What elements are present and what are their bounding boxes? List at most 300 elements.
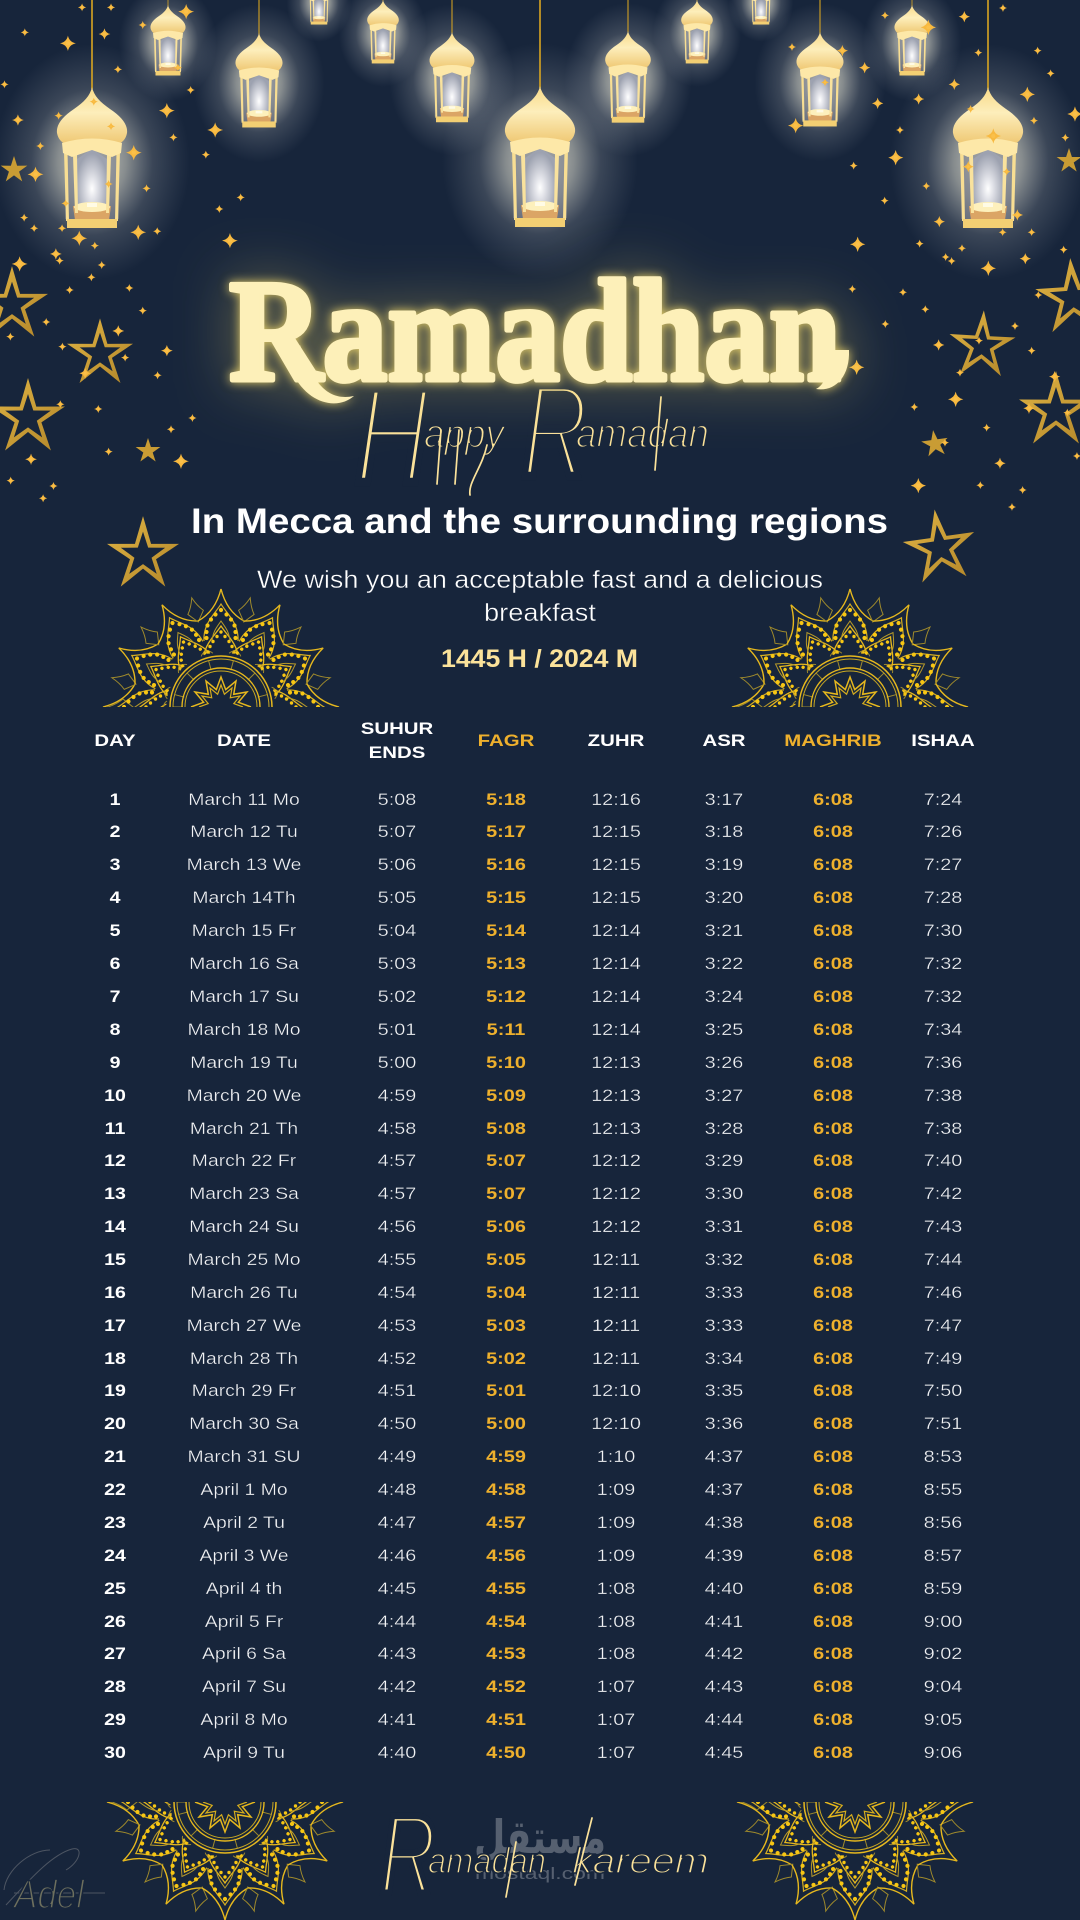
signature: Adel	[4, 1849, 105, 1917]
column: maghrib: 6:08	[813, 1150, 853, 1170]
column: ishaa: 7:38	[924, 1085, 962, 1105]
mandala: bottom right	[731, 1749, 976, 1920]
column: fagr: 5:07	[486, 1183, 526, 1203]
column: suhur ends	[378, 789, 416, 1762]
table header: DAY	[94, 731, 136, 750]
column: fagr	[486, 789, 527, 1762]
column: day: 24	[104, 1545, 127, 1565]
table header: ASR	[702, 731, 746, 750]
column: day: 3	[110, 854, 120, 874]
column: date: April 5 Fr	[205, 1612, 283, 1631]
column: suhur ends: 4:45	[378, 1578, 416, 1598]
column: zuhr: 12:10	[591, 1413, 641, 1433]
column: asr: 4:45	[705, 1742, 743, 1762]
column: suhur ends: 4:49	[378, 1446, 416, 1466]
column: zuhr: 12:14	[591, 953, 641, 973]
column: fagr: 5:01	[486, 1380, 526, 1400]
lantern: small left	[150, 0, 186, 76]
year line: 1445 H / 2024 M	[441, 645, 638, 673]
column: fagr: 5:11	[487, 1019, 525, 1039]
column: date: March 30 Sa	[189, 1414, 300, 1433]
column: day: 14	[104, 1216, 127, 1236]
column: fagr: 5:15	[486, 887, 526, 907]
column: zuhr: 1:07	[597, 1676, 635, 1696]
column: zuhr: 12:12	[591, 1216, 641, 1236]
column: asr: 4:42	[705, 1643, 743, 1663]
column: maghrib: 6:08	[813, 1512, 853, 1532]
column: ishaa: 7:44	[924, 1249, 962, 1269]
column: suhur ends: 5:05	[378, 887, 416, 907]
column: day: 29	[104, 1709, 126, 1729]
column: ishaa: 8:57	[924, 1545, 962, 1565]
column: maghrib: 6:08	[813, 1052, 853, 1072]
column: day: 9	[110, 1052, 120, 1072]
column: ishaa: 8:53	[924, 1446, 962, 1466]
column: suhur ends: 4:57	[378, 1150, 416, 1170]
column: suhur ends: 5:01	[378, 1019, 416, 1039]
column: asr: 4:37	[705, 1446, 743, 1466]
column: asr: 3:22	[705, 953, 743, 973]
column: fagr: 5:16	[486, 854, 526, 874]
table header	[94, 719, 975, 762]
column: fagr: 5:12	[486, 986, 526, 1006]
column: zuhr: 1:07	[597, 1709, 635, 1729]
column: date: April 7 Su	[202, 1677, 286, 1696]
script subtitle: Happy Ramadan: appy	[424, 412, 507, 456]
column: date: March 16 Sa	[189, 954, 300, 973]
table header: DATE	[217, 731, 271, 750]
watermark: mostaql: mostaql.com	[475, 1864, 605, 1883]
column: date: March 21 Th	[190, 1119, 298, 1138]
column: asr: 3:36	[705, 1413, 743, 1433]
column: suhur ends: 5:07	[378, 821, 416, 841]
column: zuhr: 1:09	[597, 1512, 635, 1532]
column: date: March 22 Fr	[192, 1151, 296, 1170]
lantern: large right	[953, 0, 1023, 228]
column: day: 16	[104, 1282, 126, 1302]
column: asr: 4:44	[705, 1709, 743, 1729]
column: date: March 23 Sa	[189, 1184, 300, 1203]
column: date: March 17 Su	[189, 987, 299, 1006]
column: asr: 3:20	[705, 887, 743, 907]
column: date: March 15 Fr	[192, 921, 296, 940]
column: zuhr: 12:11	[592, 1282, 640, 1302]
column: suhur ends: 4:46	[378, 1545, 416, 1565]
column: ishaa: 7:26	[924, 821, 962, 841]
column: suhur ends: 5:00	[378, 1052, 416, 1072]
column: day: 18	[104, 1348, 126, 1368]
table header: ENDS	[369, 743, 425, 762]
column: fagr: 4:58	[486, 1479, 526, 1499]
column: day: 21	[104, 1446, 126, 1466]
column: date: March 26 Tu	[190, 1283, 298, 1302]
column: day: 30	[104, 1742, 126, 1762]
column: fagr: 5:14	[486, 920, 527, 940]
column: suhur ends: 4:54	[378, 1282, 416, 1302]
column: day: 11	[105, 1118, 125, 1138]
column: day: 12	[104, 1150, 126, 1170]
column: ishaa: 8:56	[924, 1512, 962, 1532]
lantern: large centre	[505, 0, 575, 227]
column: zuhr: 12:13	[591, 1118, 641, 1138]
column: day: 5	[110, 920, 120, 940]
column: date: March 14Th	[192, 888, 296, 907]
column: suhur ends: 4:56	[378, 1216, 416, 1236]
script subtitle: Happy Ramadan	[355, 357, 709, 511]
column: ishaa: 9:02	[924, 1643, 962, 1663]
table header: FAGR	[478, 731, 535, 750]
column: maghrib: 6:08	[813, 854, 853, 874]
column: maghrib: 6:08	[813, 1676, 853, 1696]
column: fagr: 5:18	[486, 789, 526, 809]
column: ishaa: 9:05	[924, 1709, 962, 1729]
column: zuhr: 1:08	[597, 1611, 635, 1631]
column: zuhr: 12:16	[591, 789, 641, 809]
column: ishaa: 8:59	[924, 1578, 962, 1598]
prayer times table	[94, 719, 975, 1762]
column: zuhr: 12:14	[591, 986, 641, 1006]
column: ishaa: 7:46	[924, 1282, 962, 1302]
column: date: March 29 Fr	[192, 1381, 296, 1400]
column: date	[187, 790, 301, 1762]
column: suhur ends: 4:48	[378, 1479, 416, 1499]
column: date: April 8 Mo	[200, 1710, 288, 1729]
column: date: April 9 Tu	[203, 1743, 285, 1762]
column: zuhr: 12:11	[592, 1249, 640, 1269]
column: zuhr: 1:09	[597, 1479, 635, 1499]
column: suhur ends: 4:44	[378, 1611, 416, 1631]
column: zuhr: 12:12	[591, 1150, 641, 1170]
column: asr: 3:26	[705, 1052, 743, 1072]
column: ishaa: 7:34	[924, 1019, 962, 1039]
column: date: March 25 Mo	[187, 1250, 301, 1269]
column: fagr: 5:05	[486, 1249, 526, 1269]
script footer: Ramadan kareem: R	[380, 1792, 436, 1917]
column: day: 15	[104, 1249, 126, 1269]
column: asr: 3:17	[705, 789, 743, 809]
column: suhur ends: 4:59	[378, 1085, 416, 1105]
column: maghrib: 6:08	[813, 1380, 853, 1400]
column: suhur ends: 4:43	[378, 1643, 416, 1663]
lantern: medium left	[235, 0, 283, 127]
column: day: 7	[110, 986, 120, 1006]
column: ishaa: 7:30	[924, 920, 962, 940]
column: day: 10	[104, 1085, 126, 1105]
column: suhur ends: 5:02	[378, 986, 416, 1006]
column: suhur ends: 4:41	[378, 1709, 416, 1729]
column: suhur ends: 5:08	[378, 789, 416, 809]
column: date: March 12 Tu	[190, 822, 298, 841]
watermark: mostaql: مستقل	[474, 1810, 606, 1864]
column: fagr: 5:09	[486, 1085, 526, 1105]
column: ishaa: 7:32	[924, 986, 962, 1006]
column: suhur ends: 4:42	[378, 1676, 416, 1696]
sparkles: right	[788, 4, 1080, 511]
column: zuhr: 1:09	[597, 1545, 635, 1565]
column: maghrib: 6:08	[813, 1446, 853, 1466]
column: ishaa: 7:36	[924, 1052, 962, 1072]
script footer: Ramadan kareem	[380, 1792, 709, 1917]
column: date: March 13 We	[187, 855, 301, 874]
column: suhur ends: 4:53	[378, 1315, 416, 1335]
column: maghrib: 6:08	[813, 920, 853, 940]
column: fagr: 5:03	[486, 1315, 526, 1335]
column: fagr: 4:50	[486, 1742, 526, 1762]
column: fagr: 5:07	[486, 1150, 526, 1170]
column: asr: 3:27	[705, 1085, 743, 1105]
column: maghrib	[813, 789, 853, 1762]
column: ishaa: 7:43	[924, 1216, 962, 1236]
column: maghrib: 6:08	[813, 1183, 853, 1203]
column: fagr: 5:13	[486, 953, 526, 973]
column: day: 6	[110, 953, 120, 973]
script footer: Ramadan kareem: kareem	[572, 1840, 709, 1881]
column: fagr: 5:00	[486, 1413, 526, 1433]
column: zuhr: 1:08	[597, 1578, 635, 1598]
column: day: 23	[104, 1512, 126, 1532]
column: fagr: 5:10	[486, 1052, 526, 1072]
column: zuhr: 1:08	[597, 1643, 635, 1663]
lantern glows	[0, 0, 1080, 280]
column: asr: 3:34	[705, 1348, 743, 1368]
column: ishaa: 7:27	[924, 854, 962, 874]
column: asr: 3:28	[705, 1118, 743, 1138]
column: ishaa: 7:38	[924, 1118, 962, 1138]
column: fagr: 4:54	[486, 1611, 527, 1631]
column: ishaa	[924, 789, 962, 1762]
column: day	[104, 789, 127, 1762]
column: suhur ends: 4:55	[378, 1249, 416, 1269]
column: fagr: 4:56	[486, 1545, 526, 1565]
column: asr: 3:35	[705, 1380, 743, 1400]
column: suhur ends: 4:58	[378, 1118, 416, 1138]
column: zuhr	[591, 789, 641, 1762]
column: asr: 3:32	[705, 1249, 743, 1269]
column: date: March 31 SU	[187, 1447, 301, 1466]
column: asr: 3:30	[705, 1183, 743, 1203]
column: maghrib: 6:08	[813, 986, 853, 1006]
column: zuhr: 1:10	[597, 1446, 635, 1466]
column: date: April 3 We	[200, 1546, 288, 1565]
column: day: 17	[104, 1315, 126, 1335]
column: date: April 6 Sa	[202, 1644, 287, 1663]
column: suhur ends: 4:50	[378, 1413, 416, 1433]
hanging lanterns	[57, 0, 1023, 228]
column: fagr: 4:57	[486, 1512, 526, 1532]
column: fagr: 4:52	[486, 1676, 526, 1696]
lantern: tiny left	[307, 0, 331, 25]
column: asr: 4:41	[705, 1611, 743, 1631]
column: maghrib: 6:08	[813, 1085, 853, 1105]
column: zuhr: 12:14	[591, 1019, 641, 1039]
column: date: March 28 Th	[190, 1349, 298, 1368]
column: ishaa: 9:06	[924, 1742, 962, 1762]
column: day: 2	[110, 821, 120, 841]
lantern: medium centre right	[605, 0, 651, 123]
title: Ramadhan: Ramadhan	[229, 250, 841, 412]
column: zuhr: 1:07	[597, 1742, 635, 1762]
column: asr: 3:29	[705, 1150, 743, 1170]
column: fagr: 5:02	[486, 1348, 526, 1368]
column: ishaa: 7:40	[924, 1150, 962, 1170]
column: suhur ends: 4:52	[378, 1348, 416, 1368]
column: maghrib: 6:08	[813, 1479, 853, 1499]
column: ishaa: 8:55	[924, 1479, 962, 1499]
column: ishaa: 9:00	[924, 1611, 962, 1631]
column: asr: 4:37	[705, 1479, 743, 1499]
watermark: mostaql	[474, 1810, 606, 1883]
column: zuhr: 12:14	[591, 920, 641, 940]
column: asr: 3:25	[705, 1019, 743, 1039]
column: suhur ends: 5:03	[378, 953, 416, 973]
script subtitle: Happy Ramadan: R	[522, 357, 588, 504]
heading: region: In Mecca and the surrounding regions	[191, 502, 888, 541]
column: ishaa: 7:28	[924, 887, 962, 907]
wish text: We wish you an acceptable fast and a delicious	[257, 566, 823, 594]
lantern: large left	[57, 0, 127, 228]
column: maghrib: 6:08	[813, 1118, 853, 1138]
column: fagr: 4:51	[486, 1709, 526, 1729]
column: maghrib: 6:08	[813, 1709, 853, 1729]
column: day: 20	[104, 1413, 126, 1433]
column: date: March 24 Su	[189, 1217, 299, 1236]
column: fagr: 5:06	[486, 1216, 526, 1236]
column: day: 13	[104, 1183, 126, 1203]
column: asr: 3:21	[705, 920, 743, 940]
column: day: 28	[104, 1676, 126, 1696]
column: zuhr: 12:11	[592, 1315, 640, 1335]
column: asr: 3:19	[705, 854, 743, 874]
column: zuhr: 12:13	[591, 1085, 641, 1105]
column: asr: 4:40	[705, 1578, 743, 1598]
mandala: top right	[726, 586, 971, 760]
lantern: small centre left	[367, 0, 399, 63]
lantern: small centre right	[681, 0, 713, 63]
column: maghrib: 6:08	[813, 953, 853, 973]
column: asr: 3:31	[705, 1216, 743, 1236]
column: suhur ends: 4:51	[378, 1380, 416, 1400]
column: ishaa: 7:47	[924, 1315, 962, 1335]
column: maghrib: 6:08	[813, 1282, 853, 1302]
lantern: small right	[894, 0, 930, 76]
column: date: March 20 We	[187, 1086, 301, 1105]
column: fagr: 4:59	[486, 1446, 526, 1466]
column: date: April 1 Mo	[200, 1480, 288, 1499]
column: day: 19	[104, 1380, 126, 1400]
table header: SUHUR	[361, 719, 434, 738]
script subtitle: Happy Ramadan: H	[355, 359, 430, 511]
column: zuhr: 12:15	[591, 854, 641, 874]
table header: MAGHRIB	[784, 731, 882, 750]
column: fagr: 4:53	[486, 1643, 526, 1663]
column: maghrib: 6:08	[813, 1742, 853, 1762]
column: suhur ends: 5:06	[378, 854, 416, 874]
column: asr: 4:43	[705, 1676, 743, 1696]
column: asr: 3:33	[705, 1315, 743, 1335]
lantern: medium right	[796, 0, 844, 126]
column: maghrib: 6:08	[813, 789, 853, 809]
column: date: April 2 Tu	[203, 1513, 285, 1532]
column: suhur ends: 4:57	[378, 1183, 416, 1203]
column: day: 8	[110, 1019, 120, 1039]
column: maghrib: 6:08	[813, 1249, 853, 1269]
column: maghrib: 6:08	[813, 1216, 853, 1236]
script footer: Ramadan kareem: amadan	[428, 1840, 546, 1881]
column: asr: 3:33	[705, 1282, 743, 1302]
column: asr	[705, 789, 743, 1762]
column: fagr: 5:17	[486, 821, 526, 841]
column: date: March 11 Mo	[188, 790, 300, 809]
table header: ISHAA	[911, 731, 975, 750]
column: zuhr: 12:15	[591, 887, 641, 907]
column: date: April 4 th	[206, 1579, 282, 1598]
column: ishaa: 7:51	[924, 1413, 962, 1433]
column: asr: 3:24	[705, 986, 743, 1006]
column: fagr: 5:04	[486, 1282, 527, 1302]
column: maghrib: 6:08	[813, 1578, 853, 1598]
column: asr: 3:18	[705, 821, 743, 841]
script subtitle: Happy Ramadan: amadan	[576, 412, 709, 456]
column: zuhr: 12:10	[591, 1380, 641, 1400]
column: asr: 4:38	[705, 1512, 743, 1532]
column: maghrib: 6:08	[813, 1348, 853, 1368]
column: maghrib: 6:08	[813, 1643, 853, 1663]
signature: Adel: Adel	[12, 1873, 85, 1917]
column: ishaa: 7:49	[924, 1348, 962, 1368]
column: day: 27	[104, 1643, 126, 1663]
column: suhur ends: 4:40	[378, 1742, 416, 1762]
column: date: March 19 Tu	[190, 1053, 298, 1072]
column: maghrib: 6:08	[813, 821, 853, 841]
column: ishaa: 7:24	[924, 789, 962, 809]
column: fagr: 4:55	[486, 1578, 526, 1598]
column: maghrib: 6:08	[813, 1413, 853, 1433]
column: fagr: 5:08	[486, 1118, 526, 1138]
column: maghrib: 6:08	[813, 1019, 853, 1039]
column: ishaa: 7:42	[924, 1183, 962, 1203]
table header: ZUHR	[588, 731, 645, 750]
column: suhur ends: 5:04	[378, 920, 416, 940]
gold outline stars	[0, 148, 1080, 587]
column: maghrib: 6:08	[813, 1611, 853, 1631]
column: date: March 18 Mo	[187, 1020, 301, 1039]
column: zuhr: 12:13	[591, 1052, 641, 1072]
lantern: tiny right	[749, 0, 773, 25]
column: zuhr: 12:15	[591, 821, 641, 841]
lantern: medium centre left	[430, 0, 474, 122]
column: day: 1	[110, 789, 120, 809]
wish text: breakfast	[484, 599, 596, 627]
column: ishaa: 7:32	[924, 953, 962, 973]
column: asr: 4:39	[705, 1545, 743, 1565]
column: maghrib: 6:08	[813, 1545, 853, 1565]
column: ishaa: 9:04	[924, 1676, 962, 1696]
column: date: March 27 We	[187, 1316, 301, 1335]
mandala: bottom left	[101, 1749, 346, 1920]
column: ishaa: 7:50	[924, 1380, 962, 1400]
wish text	[257, 566, 823, 627]
column: day: 4	[110, 887, 121, 907]
column: maghrib: 6:08	[813, 887, 853, 907]
column: day: 22	[104, 1479, 126, 1499]
sparkles: left	[0, 3, 245, 502]
column: day: 25	[104, 1578, 126, 1598]
column: zuhr: 12:12	[591, 1183, 641, 1203]
column: suhur ends: 4:47	[378, 1512, 416, 1532]
mandala: top left	[97, 586, 342, 760]
column: maghrib: 6:08	[813, 1315, 853, 1335]
column: zuhr: 12:11	[592, 1348, 640, 1368]
